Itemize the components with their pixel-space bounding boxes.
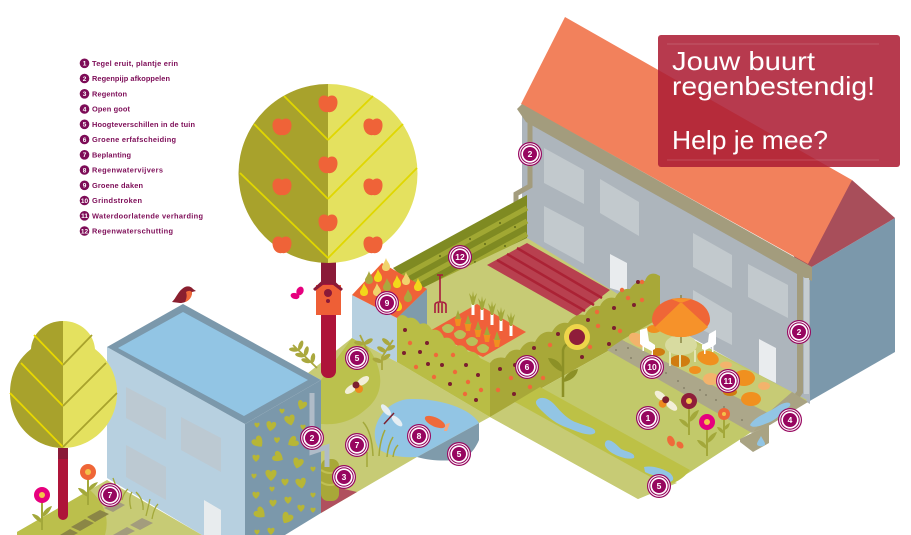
marker 7 reeds [346,434,368,456]
marker 4: 4 [788,415,793,425]
callout [658,35,900,167]
roof hip [790,180,895,268]
legend item 6: 6 [83,137,87,144]
marker 4 [779,409,801,431]
roof [521,17,852,264]
legend item 5: 5 [83,122,87,129]
red pavement stripes [487,243,610,316]
barrel base [321,488,357,513]
small tree crown right [63,321,117,448]
marker 5 tree [346,347,368,369]
legend item 10: Grindstroken [92,196,142,205]
legend item 10: 10 [81,198,88,205]
pond [375,399,479,461]
pitchfork [435,275,446,313]
legend item 9: Groene daken [92,181,143,190]
magenta flower left [32,487,52,530]
marker 12 [449,246,471,268]
small tree [10,321,117,520]
marker 6: 6 [525,362,530,372]
hearts [250,399,316,535]
legend item 11: 11 [81,213,88,220]
patio table and umbrella [640,295,716,367]
carrots [454,310,500,347]
swale band [515,387,690,485]
raised bed green roof box [352,258,427,362]
marker 3: 3 [342,472,347,482]
legend item 5: Hoogteverschillen in de tuin [92,120,195,129]
fence panel right [490,274,660,417]
chairs [640,328,716,355]
marker 3 [333,466,355,488]
butterfly magenta [290,285,305,300]
orange flower [717,408,730,438]
crown veins [240,96,417,258]
marker 8 [408,425,430,447]
fence panel left [397,315,490,417]
legend item 3: Regenton [92,89,127,98]
green roof [107,304,321,424]
bird [172,286,196,303]
marker 5 pond: 5 [457,449,462,459]
eave gutter [517,104,812,281]
legend item 4: Open goot [92,104,131,114]
inner garden ground [397,238,660,417]
gravel strip [607,340,768,433]
marker 5 tree: 5 [355,353,360,363]
roof water [118,312,308,416]
large apple tree [238,84,418,378]
umbrella [652,295,710,343]
sunflower [548,324,590,397]
marker 5 swale: 5 [657,481,662,491]
fish [423,413,450,431]
marker 1 [637,407,659,429]
terrace [622,322,792,413]
leeks [469,291,515,336]
marker 7 front [99,484,121,506]
dragonfly [379,403,404,428]
building windows [126,387,221,500]
small tree trunk [58,448,68,520]
right downpipe and gutter [740,272,808,452]
right flowers [679,393,730,456]
wall light strip [804,278,809,394]
marker 7 reeds: 7 [355,440,360,450]
front left flowers [32,464,98,530]
marker 2 house right: 2 [797,327,802,337]
building side wall [245,380,321,535]
reeds [363,422,398,467]
butterfly orange [666,435,685,450]
small tree veins [10,335,117,447]
main lawn [490,322,807,499]
small building [107,304,327,535]
marker 10: 10 [647,362,657,372]
marker 2 house left: 2 [528,149,533,159]
legend item 1: 1 [83,61,87,68]
rain barrel [321,459,339,501]
bottom strip [490,402,677,499]
windows [544,148,788,345]
legend item 7: Beplanting [92,150,131,159]
bee right [652,385,680,417]
crown left [238,84,328,263]
small tree crown left [10,321,63,448]
front left ground [17,478,202,535]
right plant sprig [354,335,396,370]
grasses [113,478,158,519]
marker 2 building: 2 [310,433,315,443]
legend item 6: Groene erfafscheiding [92,135,176,144]
marker 11: 11 [724,376,733,386]
house right wall [808,218,895,402]
gutter box [740,425,769,452]
doors [610,254,776,383]
marker 2 house right [788,321,810,343]
legend [80,58,203,236]
raised lawn area [321,338,380,424]
back hedge: water wall [393,195,527,300]
cabbages [442,324,489,353]
apples [272,95,383,253]
paving tiles [60,501,153,535]
marker 11 [717,370,739,392]
legend item 12: Regenwaterschutting [92,226,173,236]
legend item 4: 4 [83,106,87,113]
legend item 7: 7 [83,152,87,159]
marker 9: 9 [385,298,390,308]
marker 1: 1 [646,413,651,423]
marker 12: 12 [455,252,465,262]
birdhouse [313,275,343,315]
callout line 1: Jouw buurt [672,46,816,76]
vegetable bed [428,291,526,357]
legend item 11: Waterdoorlatende verharding [92,211,203,220]
legend item 8: Regenwatervijvers [92,166,163,174]
callout line 2: regenbestendig! [672,71,875,101]
legend item 2: Regenpijp afkoppelen [92,74,170,83]
legend item 8: 8 [83,167,87,174]
house with roof and wall [516,17,895,404]
burgundy flower [679,393,699,435]
legend item 9: 9 [83,183,87,190]
table [665,335,697,367]
building downpipe [312,393,327,467]
left plant sprig [289,340,317,374]
marker 10 [641,356,663,378]
marker 5 swale [648,475,670,497]
left downpipe [516,118,530,203]
legend item 3 [80,89,127,99]
legend item 2: 2 [83,76,87,83]
bee left [343,374,371,396]
magenta flower [697,414,717,456]
marker 9 [376,292,398,314]
marker 5 pond [448,443,470,465]
building door [204,500,221,535]
swale ponds [536,398,673,482]
left yard ground [308,338,490,513]
orange flower left [78,464,98,505]
terrace paving blobs [626,325,770,406]
crown right [328,84,418,263]
marker 7 front: 7 [108,490,113,500]
marker 8: 8 [417,431,422,441]
roof plants [360,258,422,311]
marker 6 [516,356,538,378]
marker 2 house left [519,143,541,165]
water in gutter [750,403,790,427]
building front wall [107,347,245,535]
legend item 12: 12 [81,228,88,235]
trunk [321,250,336,378]
legend item 1: Tegel eruit, plantje erin [92,59,178,68]
house front wall [522,108,810,404]
legend item 3: 3 [83,91,87,98]
callout line 3: Help je mee? [672,125,828,155]
marker 2 building [301,427,323,449]
